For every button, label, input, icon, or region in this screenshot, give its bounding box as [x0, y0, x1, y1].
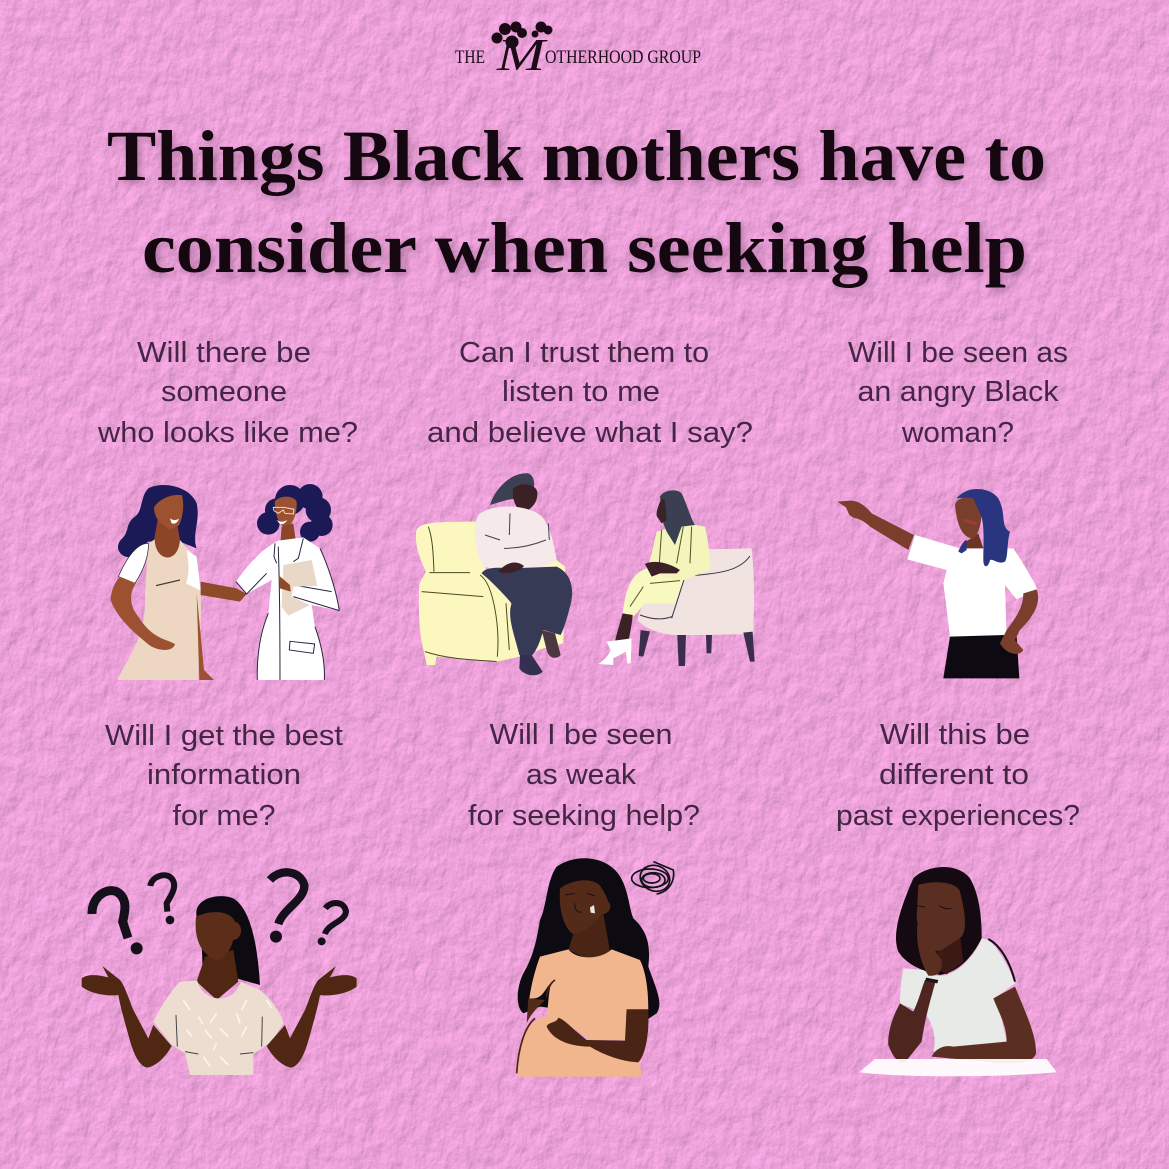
question 4: information	[147, 759, 301, 791]
question 5	[468, 719, 700, 832]
illustration: pregnant woman with doctor	[111, 484, 339, 680]
question 2	[427, 337, 753, 449]
logo: The Motherhood Group	[455, 22, 701, 80]
logo: The Motherhood Group: THE	[455, 47, 485, 68]
question 1: who looks like me?	[97, 417, 358, 449]
illustration: confused woman with question marks	[82, 872, 357, 1075]
illustration: sad pregnant woman crying with scribble	[517, 858, 674, 1077]
question 1	[97, 337, 358, 449]
question 2: Can I trust them to	[459, 337, 709, 369]
question 2: listen to me	[502, 376, 660, 408]
question 1: someone	[161, 376, 287, 408]
title: Things Black mothers have to	[110, 120, 1049, 200]
question 3	[848, 337, 1068, 449]
title: consider when seeking help	[142, 208, 1027, 288]
question 5: Will I be seen	[490, 719, 672, 751]
question 3: woman?	[901, 417, 1014, 449]
question 5: for seeking help?	[468, 800, 700, 832]
illustration: two women talking in armchairs	[416, 473, 755, 675]
question 6: Will this be	[880, 719, 1030, 751]
question 4: for me?	[172, 800, 276, 832]
question 6: different to	[879, 759, 1029, 791]
question 5: as weak	[526, 759, 637, 791]
question 2: and believe what I say?	[427, 417, 753, 449]
question 6	[836, 719, 1080, 832]
illustration: tired woman leaning on table	[859, 867, 1057, 1076]
illustration: angry woman pointing	[837, 489, 1038, 678]
logo: The Motherhood Group: M	[496, 29, 548, 80]
question 3: an angry Black	[858, 376, 1059, 408]
question 1: Will there be	[137, 337, 311, 369]
logo: The Motherhood Group: OTHERHOOD GROUP	[545, 47, 701, 68]
title: consider when seeking help	[145, 212, 1030, 292]
question 4	[105, 720, 343, 832]
question 4: Will I get the best	[105, 720, 343, 752]
question 3: Will I be seen as	[848, 337, 1068, 369]
title	[107, 116, 1049, 292]
title: Things Black mothers have to	[107, 116, 1046, 196]
question 6: past experiences?	[836, 800, 1080, 832]
